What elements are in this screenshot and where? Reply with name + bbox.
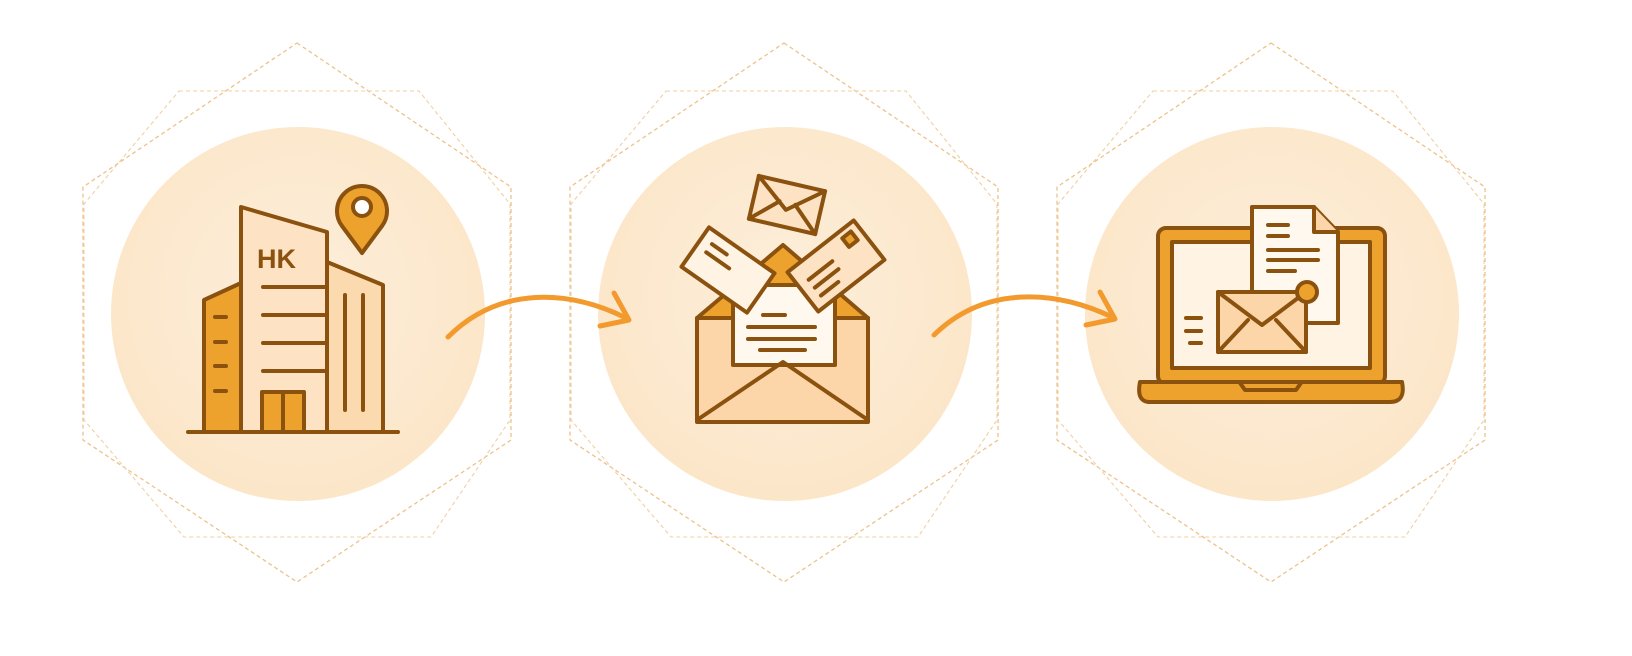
icon: building [188, 186, 398, 432]
panel: mail [570, 43, 998, 582]
background circle 3 [1085, 127, 1459, 501]
icon: envelopes [681, 176, 884, 422]
arrow 1 [448, 293, 629, 337]
text: HK: HK [257, 244, 296, 274]
panel: laptop [1057, 43, 1485, 582]
arrow 2 [934, 292, 1115, 335]
background circle 1 [111, 127, 485, 501]
panel: office building [83, 43, 511, 582]
icon: laptop with document and email [1139, 207, 1403, 402]
background circle 2 [598, 127, 972, 501]
